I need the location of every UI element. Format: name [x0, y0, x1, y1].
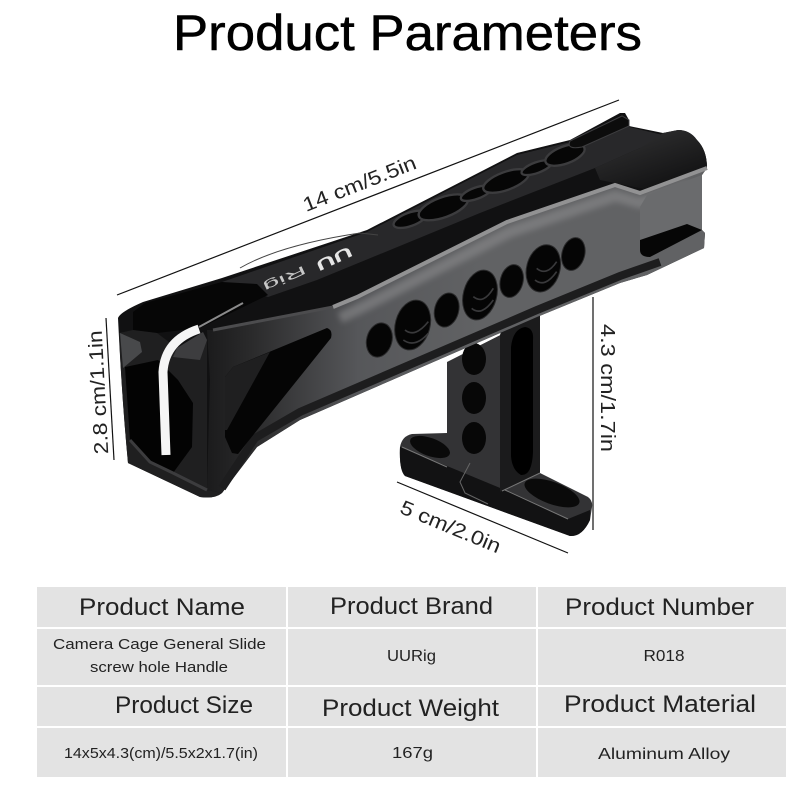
cell: product brand heading: Product Brand	[330, 593, 493, 620]
cell: number value	[538, 629, 786, 685]
right end of handle top	[595, 130, 707, 190]
cell: material value: Aluminum Alloy	[598, 746, 730, 763]
front face	[119, 330, 222, 498]
cell: size value: 14x5x4.3(cm)/5.5x2x1.7(in)	[64, 745, 258, 762]
cell: number value: R018	[644, 648, 685, 665]
dimension: length	[117, 100, 619, 295]
cell: product name heading: Product Name	[79, 594, 245, 621]
cell: product number heading	[538, 587, 786, 627]
cell: weight value	[288, 728, 536, 777]
front bottom edge highlight	[130, 440, 207, 490]
cell: product material heading	[538, 687, 786, 726]
cell: product size heading: Product Size	[115, 692, 253, 719]
rear rail slot	[569, 116, 629, 148]
dimension: bracket width	[397, 482, 568, 558]
cell: product material heading: Product Material	[564, 691, 756, 718]
dimension: front height: 2.8 cm/1.1in	[85, 330, 113, 455]
lower edge shadow	[222, 262, 660, 488]
cell: weight value: 167g	[392, 745, 433, 762]
front face corner left	[120, 333, 142, 368]
cell: product brand heading	[288, 587, 536, 627]
logo recess	[240, 233, 378, 268]
logo: Rig	[261, 263, 308, 295]
cell: size value	[37, 728, 286, 777]
soft light band under the ridge	[340, 186, 690, 318]
dimension: length: 14 cm/5.5in	[300, 152, 420, 217]
hex key	[163, 303, 243, 455]
logo: UU	[313, 242, 355, 274]
dimension: bracket width: 5 cm/2.0in	[397, 497, 504, 558]
right rounded cut-out	[640, 175, 702, 257]
side face highlight	[333, 168, 707, 307]
cell: material value	[538, 728, 786, 777]
side threaded holes	[363, 235, 589, 360]
front face corner right	[173, 332, 207, 360]
cell: product size heading	[37, 687, 286, 726]
triangular cut-out	[225, 328, 332, 454]
parameter table	[37, 587, 786, 777]
cell: product name value	[37, 629, 286, 685]
title: Product Parameters	[173, 5, 642, 61]
cell: brand value	[288, 629, 536, 685]
top threaded holes	[391, 140, 587, 232]
mounting bracket	[400, 315, 592, 536]
grey side face	[207, 168, 707, 493]
cell: product number heading: Product Number	[565, 594, 754, 621]
cell: product name heading	[37, 587, 286, 627]
cell: product weight heading	[288, 687, 536, 726]
top face	[222, 118, 692, 297]
cell: brand value: UURig	[387, 648, 436, 665]
handle body	[118, 113, 707, 498]
front face pocket	[125, 360, 193, 473]
cell: product weight heading: Product Weight	[322, 695, 499, 722]
cell: product name value: screw hole Handle	[90, 659, 228, 676]
dimension: bracket height: 4.3 cm/1.7in	[596, 324, 618, 452]
dim left edge	[213, 307, 333, 330]
product photo: camera handle	[118, 113, 707, 536]
front rail slot	[133, 282, 268, 333]
logo	[261, 242, 355, 295]
cell: product name value: Camera Cage General Slide	[53, 636, 266, 653]
